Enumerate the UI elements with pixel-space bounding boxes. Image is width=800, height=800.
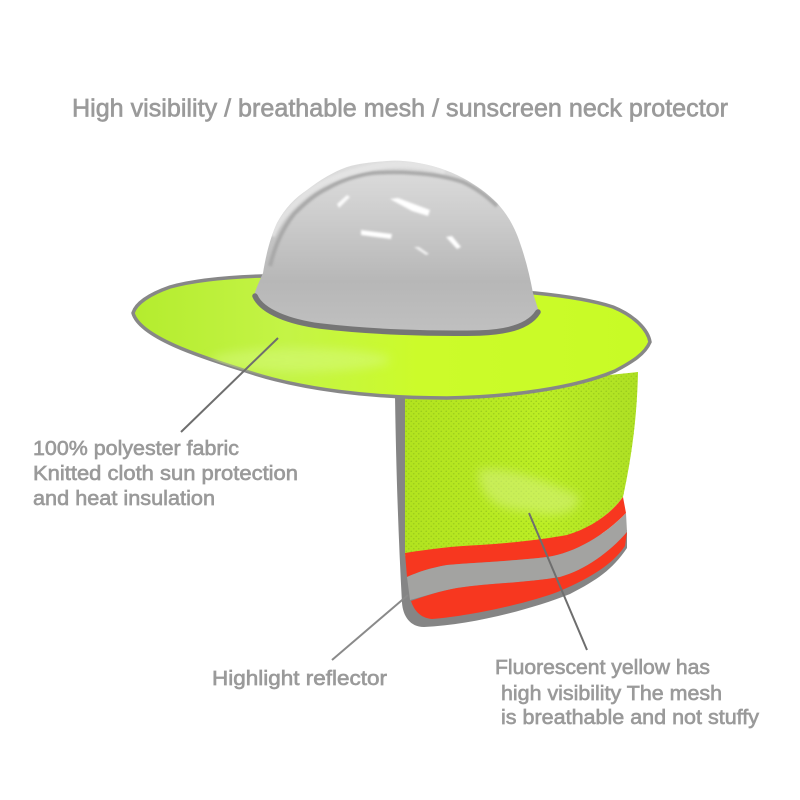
callout: mesh: Fluorescent yellow has	[495, 656, 710, 679]
callout: fabric: 100% polyester fabric	[33, 437, 239, 460]
callout: reflector: Highlight reflector	[212, 667, 387, 690]
leader line: mesh	[529, 513, 587, 650]
lower red band	[411, 532, 627, 619]
callout: mesh	[495, 656, 760, 729]
brim highlight	[210, 348, 390, 372]
callout: mesh: is breathable and not stuffy	[501, 706, 760, 729]
helmet highlights	[337, 195, 461, 255]
brim fabric	[133, 276, 650, 398]
brim	[133, 276, 650, 398]
leader line: fabric	[181, 338, 278, 432]
helmet base rim	[255, 296, 538, 333]
callout: fabric: and heat insulation	[33, 487, 215, 510]
flap grey binding	[395, 396, 627, 627]
flap sheer patch	[478, 469, 579, 515]
helmet ridge	[270, 164, 497, 266]
title: High visibility / breathable mesh / sunscreen neck protector	[72, 94, 728, 122]
helmet dome	[254, 161, 539, 333]
callout: fabric: Knitted cloth sun protection	[33, 462, 298, 485]
callout: mesh: high visibility The mesh	[501, 682, 722, 705]
upper red band	[405, 497, 626, 577]
hard hat	[254, 161, 539, 333]
callout: fabric	[33, 437, 298, 510]
neck protector flap	[395, 372, 638, 627]
silver reflective band	[407, 513, 627, 600]
flap mesh fabric	[405, 372, 638, 556]
leader line: reflector	[332, 595, 408, 660]
